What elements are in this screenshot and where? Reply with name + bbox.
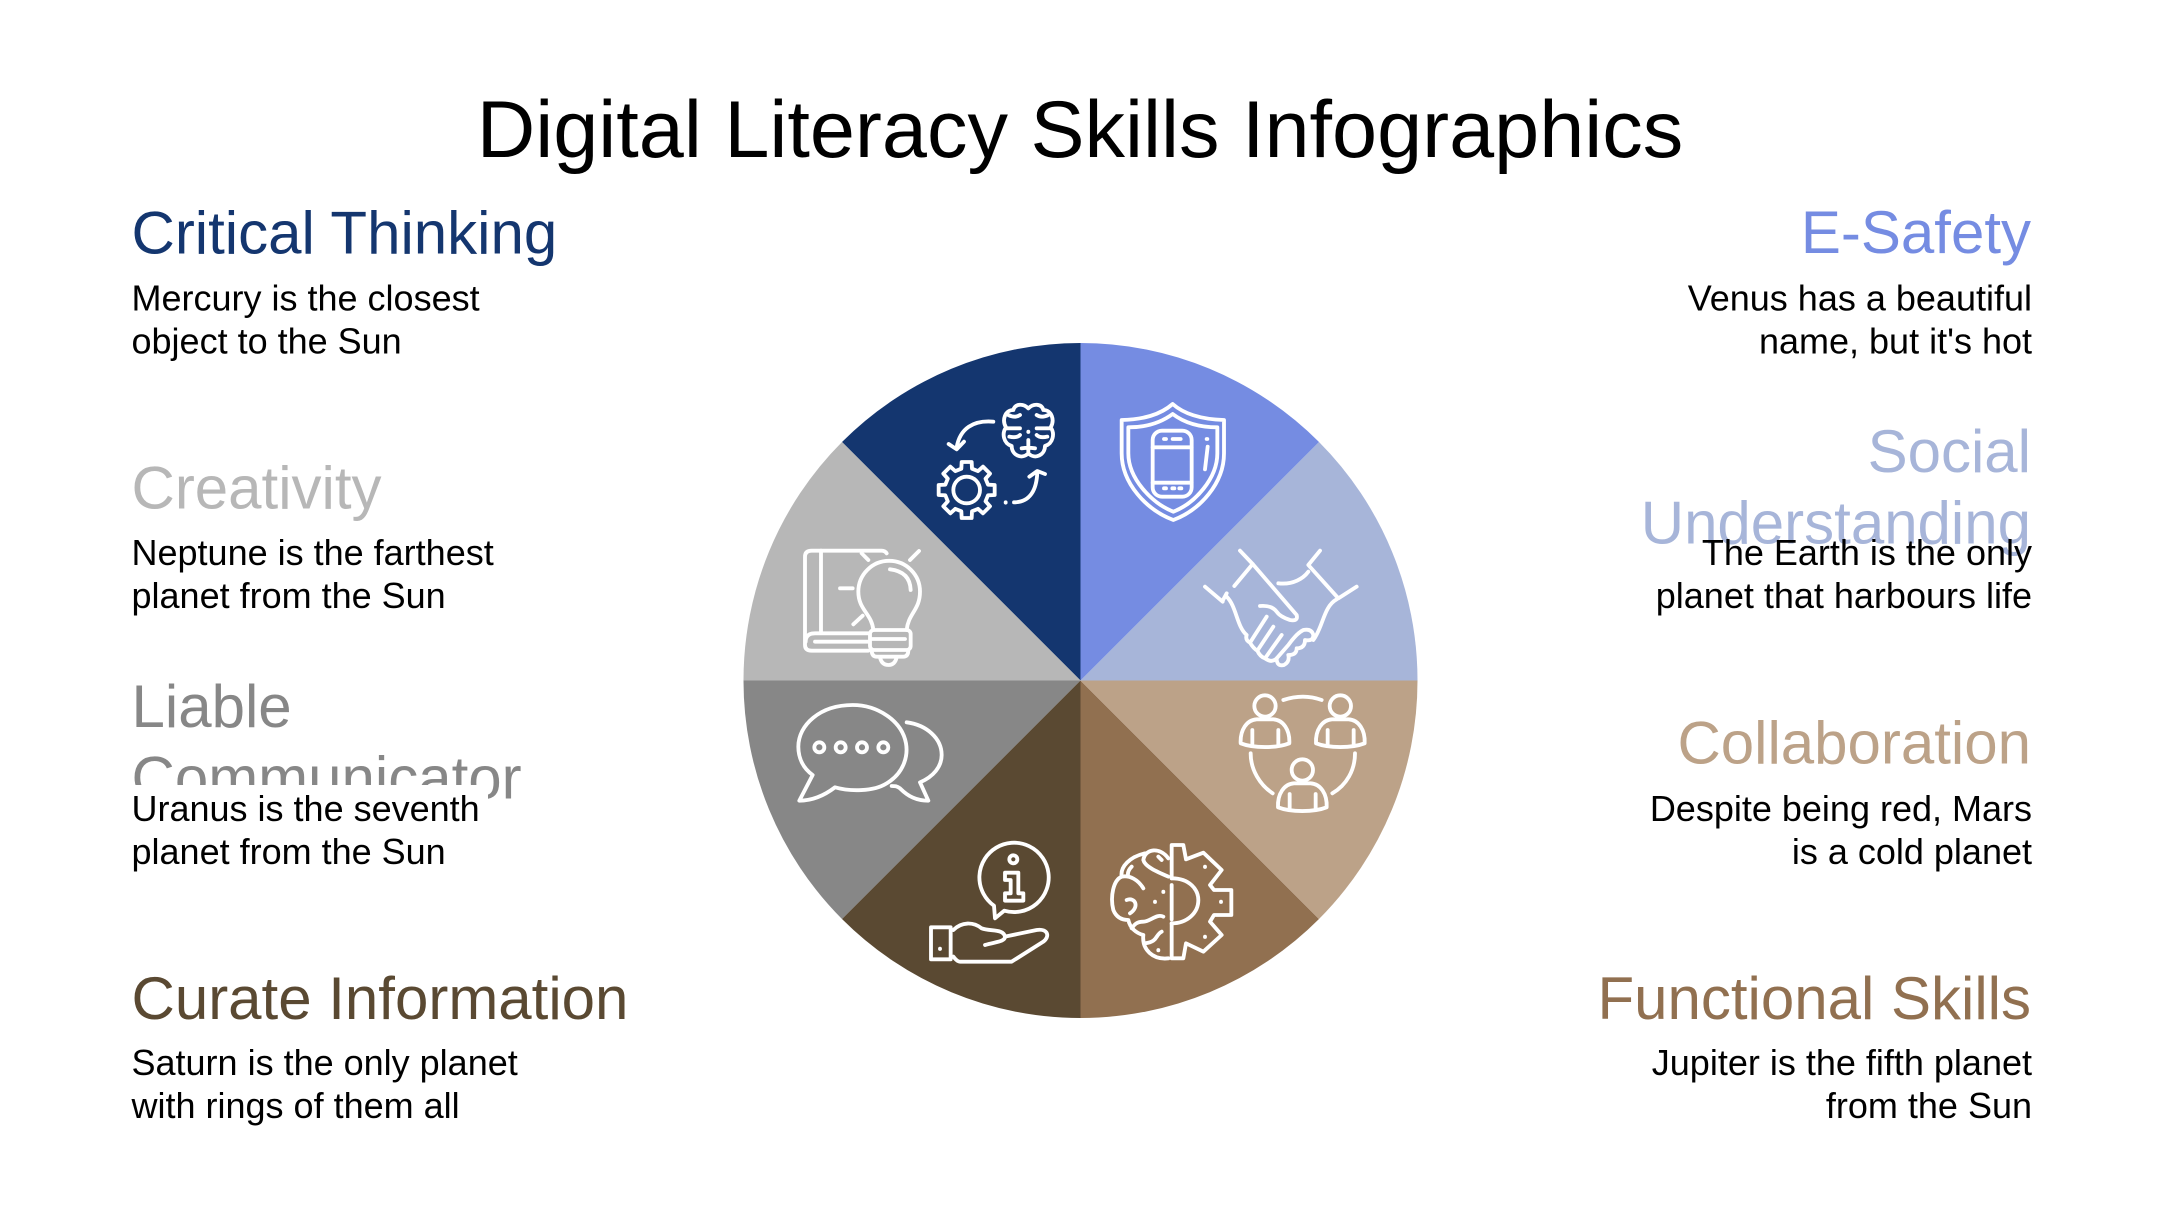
heading: functional skills: Functional Skills bbox=[1597, 965, 2031, 1032]
icon: shield with phone bbox=[1122, 404, 1224, 520]
slice: liable communicator bbox=[743, 680, 1080, 919]
slice: curate information bbox=[842, 680, 1080, 1018]
heading: critical thinking: Critical Thinking bbox=[132, 200, 557, 266]
slice: creativity bbox=[743, 442, 1080, 680]
text: critical thinking description: object to the Sun bbox=[132, 321, 402, 362]
text: functional skills description: Jupiter is the fifth planet bbox=[1652, 1042, 2032, 1083]
panel: creativity bbox=[132, 454, 494, 616]
text: creativity description: Neptune is the farthest bbox=[132, 532, 494, 573]
icon: book and light bulb bbox=[805, 551, 920, 665]
slice: functional skills bbox=[1080, 680, 1319, 1018]
text box: liable communicator description: Uranus is the seventh bbox=[132, 788, 480, 829]
slice: e-safety bbox=[1080, 343, 1319, 680]
heading: collaboration: Collaboration bbox=[1677, 710, 2031, 776]
panel: social understanding bbox=[1641, 418, 2032, 616]
icon: hand with info bubble bbox=[931, 843, 1049, 962]
panel: collaboration bbox=[1650, 710, 2032, 872]
text box: liable communicator description bbox=[120, 785, 488, 880]
text: curate information description: Saturn is the only planet bbox=[132, 1042, 518, 1083]
text: creativity description: planet from the Sun bbox=[132, 575, 446, 616]
slice: collaboration bbox=[1080, 680, 1418, 919]
pie chart bbox=[743, 343, 1418, 1018]
panel: liable communicator bbox=[120, 673, 522, 880]
icon: speech bubbles bbox=[798, 705, 942, 801]
text box: liable communicator description: planet from the Sun bbox=[132, 831, 446, 872]
heading: creativity: Creativity bbox=[132, 454, 382, 522]
icon: brain and gear cycle bbox=[939, 405, 1053, 518]
panel: functional skills bbox=[1597, 965, 2032, 1126]
slice: critical thinking bbox=[842, 343, 1080, 680]
icon: brain and gear bbox=[1112, 845, 1231, 959]
icon: handshake bbox=[1205, 551, 1357, 665]
panel: e-safety bbox=[1688, 199, 2032, 362]
heading: social understanding: Understanding bbox=[1641, 490, 2031, 556]
text: social understanding description: planet that harbours life bbox=[1656, 575, 2032, 616]
heading: liable communicator: Liable bbox=[132, 673, 292, 740]
text: e-safety description: Venus has a beautiful bbox=[1688, 278, 2032, 318]
slice: social understanding bbox=[1080, 442, 1418, 680]
panel: critical thinking bbox=[132, 200, 557, 362]
panel: curate information bbox=[130, 965, 628, 1126]
text: functional skills description: from the Sun bbox=[1826, 1085, 2032, 1126]
heading: social understanding: Social bbox=[1868, 418, 2031, 485]
heading: curate information: Curate Information bbox=[132, 965, 628, 1032]
icon: people network bbox=[1241, 695, 1365, 811]
heading: e-safety: E-Safety bbox=[1801, 199, 2031, 266]
text: e-safety description: name, but it's hot bbox=[1759, 321, 2032, 362]
text: critical thinking description: Mercury is the closest bbox=[132, 278, 480, 318]
title: Digital Literacy Skills Infographics bbox=[477, 85, 1683, 175]
text: social understanding description: The Earth is the only bbox=[1702, 532, 2032, 573]
text: curate information description: with rings of them all bbox=[130, 1085, 460, 1126]
text: collaboration description: Despite being red, Mars bbox=[1650, 788, 2032, 829]
heading: liable communicator: Communicator bbox=[132, 744, 522, 812]
text: collaboration description: is a cold planet bbox=[1792, 831, 2032, 872]
